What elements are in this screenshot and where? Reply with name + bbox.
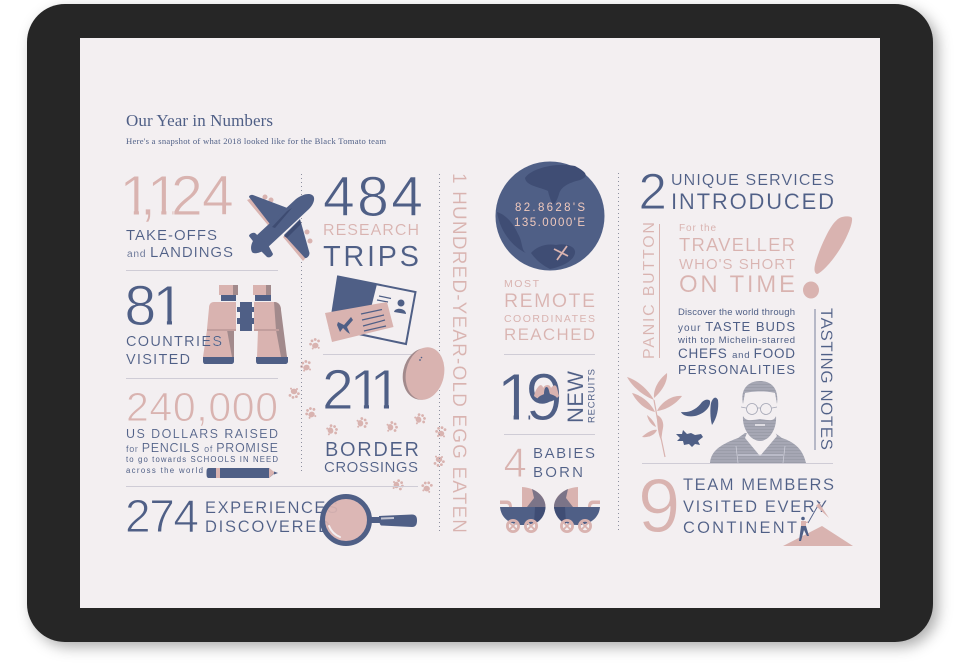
stat: 4 babies born: BABIES [533,445,595,462]
icon: star anise [676,430,703,447]
icon: herb branch [627,373,682,457]
vertical text: 1 hundred-year-old egg eaten: 1 HUNDRED-YEAR-OLD EGG EATEN [448,173,469,533]
stat: 1,124 take-offs and landings: and LANDINGS [127,244,233,261]
stat: 2 unique services introduced: 2 [638,163,667,220]
icon: egg [398,344,449,404]
title: Our Year in Numbers [126,111,273,130]
stat: 484 research trips: 484 [323,165,423,229]
stat: 240,000 US dollars raised: across the world [126,466,203,475]
stat: 2 unique services introduced [638,163,834,220]
stat: most remote coordinates reached: REMOTE [504,290,595,312]
stat: 19 new recruits [497,360,598,435]
globe with coordinates [496,162,604,270]
stat: 1,124 take-offs and landings: 1,124 [120,164,234,228]
stat: 211 border crossings: 211 [322,358,401,422]
stat: 4 babies born: 4 [504,439,527,486]
panel: tasting notes: Discover the world through [678,307,795,318]
subtitle: Here's a snapshot of what 2018 looked like for the Black Tomato team [126,136,386,146]
stat: 1,124 take-offs and landings [120,164,234,261]
icon: prams [500,487,600,532]
panel: tasting notes [677,307,836,450]
icon: passport and ticket [325,276,416,344]
panel: panic button: PANIC BUTTON [641,222,658,359]
stat: most remote coordinates reached: REACHED [504,325,595,344]
panel: panic button: ON TIME [679,271,795,298]
panel: tasting notes: CHEFS and FOOD [678,346,795,361]
icon: pencil [206,468,278,478]
stat: 4 babies born [504,439,595,486]
dotted column dividers [302,173,618,533]
stat: most remote coordinates reached [504,278,595,344]
panel: panic button: For the [679,223,716,234]
stat: 9 team members visited every continent: 9 [638,464,680,549]
stat: 240,000 US dollars raised: US DOLLARS RAISED [126,427,278,441]
stat: 2 unique services introduced: INTRODUCED [671,189,834,214]
stat: 484 research trips: TRIPS [323,241,419,273]
panel: tasting notes: TASTING NOTES [817,308,836,450]
stat: 81 countries visited [124,274,222,368]
stat: 9 team members visited every continent: VISITED EVERY [683,498,827,516]
globe with coordinates: 135.0000'E [514,217,585,229]
stat: 81 countries visited: VISITED [126,352,190,368]
panel: panic button [641,216,852,359]
stat: 9 team members visited every continent [638,464,834,549]
stat: 9 team members visited every continent: CONTINENT [683,519,797,537]
icon: chillies [681,398,718,425]
stat: 19 new recruits: 19 [497,360,563,435]
stat: 9 team members visited every continent: TEAM MEMBERS [683,476,834,494]
stat: 484 research trips: RESEARCH [323,222,419,239]
panel: panic button: TRAVELLER [679,234,795,255]
panel: panic button: WHO'S SHORT [679,256,795,273]
stat: 484 research trips [323,165,423,273]
icon: plane [247,194,314,261]
stat: 240,000 US dollars raised: for PENCILS of PROMISE [126,441,278,455]
stat: 274 experiences discovered: EXPERIENCES [205,499,338,517]
panel: tasting notes: with top Michelin-starred [677,335,795,346]
panel: tasting notes: your TASTE BUDS [678,319,795,334]
icon: magnifying glass [322,496,417,544]
stat: 274 experiences discovered [125,490,338,542]
icon: mountain climber with flag [783,502,853,546]
stat: 211 border crossings: CROSSINGS [324,459,418,476]
stat: 1,124 take-offs and landings: TAKE-OFFS [126,227,217,244]
stat: 81 countries visited: 81 [124,274,184,338]
stat: 81 countries visited: COUNTRIES [126,334,222,350]
stat: 2 unique services introduced: UNIQUE SERVICES [671,172,834,189]
globe with coordinates: 82.8628'S [515,202,585,214]
stat: most remote coordinates reached: MOST [504,278,540,290]
horizontal dividers [126,270,833,486]
stat: most remote coordinates reached: COORDINATES [504,313,595,325]
stat: 274 experiences discovered: 274 [125,490,199,542]
stat: 274 experiences discovered: DISCOVERED [205,518,330,536]
stat: 211 border crossings: BORDER [325,439,419,461]
screen background [80,38,880,608]
stat: 240,000 US dollars raised: to go towards SCHOOLS IN NEED [126,455,278,464]
stat: 211 border crossings [322,358,419,476]
paw prints trail [289,337,446,493]
portrait: chef [710,381,806,463]
panel: tasting notes: PERSONALITIES [678,362,795,377]
stat: 4 babies born: BORN [533,464,583,481]
icon: binoculars [203,285,288,364]
stat: 240,000 US dollars raised [126,384,278,475]
stat: 240,000 US dollars raised: 240,000 [126,384,278,430]
stat: 19 new recruits: RECRUITS [586,369,598,423]
stat: 19 new recruits: NEW [563,371,588,423]
